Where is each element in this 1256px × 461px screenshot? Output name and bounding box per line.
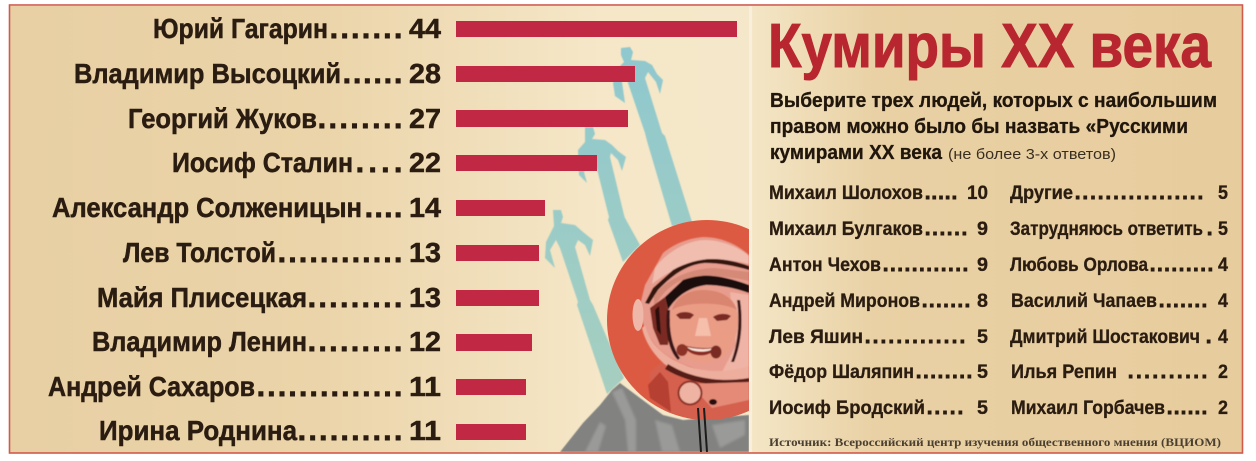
row: Андрей Миронов: Андрей Миронов	[769, 291, 920, 312]
helmet neck ring	[642, 325, 749, 382]
row: Майя Плисецкая	[97, 282, 441, 313]
helmet highlight	[652, 240, 749, 284]
row: Иосиф Сталин: ....	[356, 147, 402, 178]
question text: правом можно было бы назвать «Русскими	[770, 116, 1188, 138]
row: Георгий Жуков: ........	[318, 103, 402, 134]
row: Михаил Горбачев: Михаил Горбачев	[1011, 398, 1165, 419]
secondary list: left column	[769, 183, 988, 419]
bar: 13	[456, 245, 539, 261]
row: Андрей Сахаров: 11	[409, 371, 441, 402]
row: Ирина Роднина	[99, 415, 441, 446]
illustration: flying cosmonaut silhouettes	[545, 47, 692, 394]
source note: Источник: Всероссийский центр изучения общественного мнения (ВЦИОМ)	[769, 435, 1221, 449]
row: Затрудняюсь ответить: Затрудняюсь ответить	[1010, 219, 1203, 240]
bar: 12	[456, 334, 532, 351]
row: Ирина Роднина: 11	[409, 415, 441, 446]
row: Антон Чехов: Антон Чехов	[769, 255, 881, 276]
helmet lining right	[722, 292, 749, 372]
red circle	[607, 220, 749, 420]
row: Любовь Орлова: Любовь Орлова	[1010, 255, 1148, 276]
row: Андрей Сахаров: ..............	[257, 371, 402, 402]
cosmonaut jacket	[560, 383, 749, 452]
row: Илья Репин: ..........	[1128, 362, 1207, 383]
row: Михаил Горбачев: 2	[1218, 398, 1228, 419]
row: Иосиф Сталин: 22	[409, 147, 441, 178]
row: Илья Репин	[1011, 362, 1228, 383]
row: Андрей Миронов: .......	[922, 291, 970, 312]
row: Антон Чехов: 9	[977, 255, 988, 276]
row: Андрей Миронов: 8	[977, 291, 988, 312]
row: Владимир Ленин	[92, 326, 441, 357]
row: Владимир Высоцкий: 28	[409, 58, 441, 89]
suit collar	[650, 360, 749, 421]
row: Александр Солженицын: Александр Солженицын	[52, 192, 362, 223]
bar: 28	[456, 66, 635, 82]
bar: 13	[456, 290, 539, 306]
row: Фёдор Шаляпин: 5	[977, 362, 988, 383]
row: Илья Репин: 2	[1218, 362, 1228, 383]
panel: chart background	[10, 6, 750, 453]
row: Василий Чапаев: .......	[1159, 291, 1207, 312]
row: Любовь Орлова: .........	[1150, 255, 1213, 276]
row: Михаил Шолохов: 10	[967, 183, 988, 204]
row: Юрий Гагарин: .......	[330, 13, 402, 44]
icon: upper silhouette	[613, 47, 692, 226]
row: Затрудняюсь ответить: .	[1207, 219, 1212, 240]
row: Лев Яшин: 5	[977, 327, 988, 348]
row: Владимир Ленин: .........	[308, 326, 402, 357]
face	[730, 308, 738, 338]
question text	[770, 90, 1217, 164]
row: Александр Солженицын: ....	[365, 192, 402, 223]
row: Василий Чапаев: Василий Чапаев	[1011, 291, 1157, 312]
bar: 11	[456, 379, 526, 395]
row: Лев Яшин: Лев Яшин	[769, 327, 863, 348]
question text: Выберите трех людей, которых с наибольшим	[770, 90, 1217, 112]
row: Другие: .................	[1075, 183, 1203, 204]
row: Майя Плисецкая: .........	[308, 282, 402, 313]
row: Юрий Гагарин: Юрий Гагарин	[153, 13, 328, 44]
row: Иосиф Бродский: .....	[927, 398, 963, 419]
row: Андрей Сахаров	[48, 371, 441, 402]
icon: middle silhouette	[578, 127, 640, 262]
panel: text background	[750, 6, 1242, 453]
panel separator	[749, 6, 752, 453]
bar chart	[456, 21, 737, 440]
row: Владимир Высоцкий: Владимир Высоцкий	[74, 58, 341, 89]
row: Владимир Ленин: Владимир Ленин	[92, 326, 307, 357]
row: Лев Яшин: .............	[865, 327, 965, 348]
helmet visor rim	[645, 259, 749, 304]
bar: 14	[456, 200, 545, 216]
row: Другие	[1010, 183, 1228, 204]
strap	[648, 372, 671, 412]
row: Лев Толстой: ............	[278, 237, 402, 268]
row: Антон Чехов	[769, 255, 988, 276]
row: Антон Чехов: ............	[883, 255, 968, 276]
row: Юрий Гагарин	[153, 13, 441, 44]
illustration: cosmonaut portrait in red circle	[560, 220, 749, 452]
helmet visor band	[654, 268, 749, 308]
row: Ирина Роднина: ..........	[298, 415, 402, 446]
portrait details	[640, 237, 749, 421]
jacket folds	[585, 388, 745, 452]
row: Иосиф Сталин: Иосиф Сталин	[172, 147, 353, 178]
helmet side dome	[632, 299, 644, 331]
row: Илья Репин: Илья Репин	[1011, 362, 1117, 383]
microphones	[676, 344, 688, 356]
bar: 22	[456, 155, 597, 171]
row: Дмитрий Шостакович: 4	[1218, 327, 1228, 348]
nose	[695, 318, 711, 336]
row: Фёдор Шаляпин: Фёдор Шаляпин	[769, 362, 914, 383]
suit neck band	[698, 381, 749, 408]
row: Михаил Булгаков: 9	[977, 219, 988, 240]
row: Майя Плисецкая: 13	[409, 282, 441, 313]
smile	[686, 346, 712, 356]
helmet shell	[640, 237, 749, 374]
row: Лев Яшин	[769, 327, 988, 348]
bar: 44	[456, 21, 737, 37]
row: Михаил Булгаков: ......	[925, 219, 967, 240]
bar: 27	[456, 110, 628, 127]
row: Александр Солженицын: 14	[409, 192, 441, 223]
row: Михаил Шолохов: Михаил Шолохов	[769, 183, 923, 204]
helmet interior left	[650, 297, 670, 345]
row: Любовь Орлова	[1010, 255, 1228, 276]
icon: lower silhouette	[545, 210, 624, 394]
row: Дмитрий Шостакович: .	[1206, 327, 1211, 348]
face shade line	[666, 300, 742, 362]
teeth	[687, 347, 713, 352]
row: Иосиф Бродский: 5	[977, 398, 988, 419]
neck bearing	[678, 382, 702, 404]
row: Георгий Жуков: Георгий Жуков	[128, 103, 317, 134]
row: Лев Толстой	[123, 237, 441, 268]
row: Михаил Булгаков: Михаил Булгаков	[769, 219, 923, 240]
row: Иосиф Бродский: Иосиф Бродский	[769, 398, 925, 419]
eyes	[676, 312, 731, 321]
row: Дмитрий Шостакович: Дмитрий Шостакович	[1010, 327, 1200, 348]
row: Василий Чапаев: 4	[1218, 291, 1228, 312]
row: Затрудняюсь ответить: 5	[1218, 219, 1228, 240]
row: Другие: 5	[1218, 183, 1228, 204]
row: Георгий Жуков: 27	[409, 103, 441, 134]
row: Юрий Гагарин: 44	[409, 13, 441, 44]
row: Другие: Другие	[1010, 183, 1073, 204]
zipper	[698, 408, 707, 452]
bar: 11	[456, 424, 526, 440]
row: Михаил Горбачев: ......	[1167, 398, 1207, 419]
row: Лев Толстой: Лев Толстой	[123, 237, 276, 268]
title: Кумиры XX века	[768, 12, 1211, 81]
row: Лев Толстой: 13	[409, 237, 441, 268]
row: Владимир Высоцкий: ......	[343, 58, 402, 89]
row: Ирина Роднина: Ирина Роднина	[99, 415, 297, 446]
question text: (не более 3-х ответов)	[948, 146, 1116, 163]
secondary list: right column	[1010, 183, 1228, 419]
collar button	[709, 399, 717, 405]
question text: кумирами XX века	[770, 142, 943, 164]
neck ring dark line	[665, 364, 749, 385]
row: Майя Плисецкая: Майя Плисецкая	[97, 282, 307, 313]
row: Любовь Орлова: 4	[1218, 255, 1228, 276]
forehead band	[672, 290, 737, 310]
row: Андрей Сахаров: Андрей Сахаров	[48, 371, 255, 402]
helmet inner visor	[665, 276, 749, 310]
row: Михаил Шолохов: .....	[925, 183, 957, 204]
row: Фёдор Шаляпин: ........	[916, 362, 972, 383]
row: Владимир Ленин: 12	[409, 326, 441, 357]
main names list	[48, 13, 441, 446]
row: Георгий Жуков	[128, 103, 441, 134]
